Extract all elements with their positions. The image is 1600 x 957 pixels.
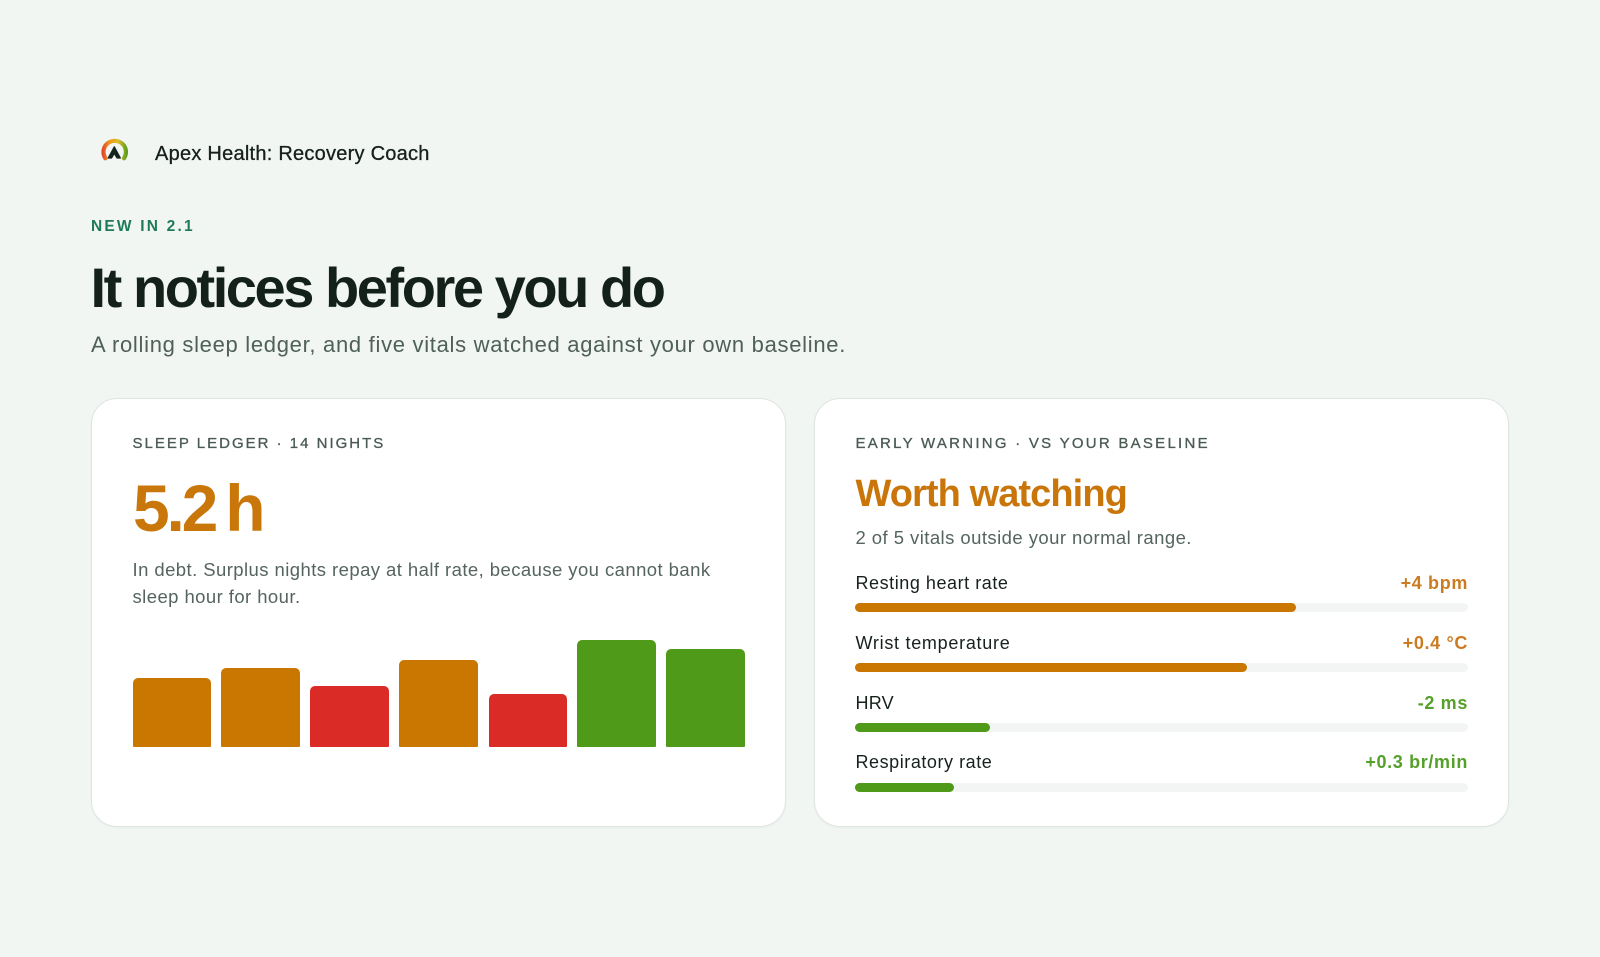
sleep debt explanation: sleep hour for hour. [132,586,301,607]
vital: respiratory rate value: +0.3 br/min [1365,752,1468,772]
vital: resting heart rate label: Resting heart rate [856,573,1008,593]
vital: wrist temperature bar [855,663,1468,672]
vital: resting heart rate value: +4 bpm [1401,573,1468,593]
vital: wrist temperature value: +0.4 °C [1403,633,1468,653]
vital: resting heart rate bar [855,603,1468,612]
vital: wrist temperature label: Wrist temperature [856,633,1010,653]
sleep debt explanation: In debt. Surplus nights repay at half rate, because you cannot bank [132,559,711,580]
sleep ledger heading: SLEEP LEDGER · 14 NIGHTS [132,435,385,452]
vital: HRV value: -2 ms [1418,692,1468,712]
bar chart: nightly sleep [133,640,745,747]
early warning heading: EARLY WARNING · VS YOUR BASELINE [856,435,1210,452]
vital: HRV bar [855,723,1468,732]
status summary: 2 of 5 vitals outside your normal range. [856,527,1192,548]
panel: sleep ledger [91,398,786,827]
panel: early warning [814,398,1509,827]
vital: HRV label: HRV [856,692,894,712]
vital: respiratory rate label: Respiratory rate [856,752,992,772]
brand name: Apex Health: Recovery Coach [155,142,430,164]
sleep debt figure: 5.2 h [133,471,262,545]
status headline: Worth watching [856,473,1127,515]
sleep debt explanation [132,559,711,607]
vital: respiratory rate bar [855,782,1468,792]
eyebrow: NEW IN 2.1 [91,218,195,235]
subtitle: A rolling sleep ledger, and five vitals watched against your own baseline. [91,332,846,357]
logo: gauge arc with peak mark [101,138,128,160]
title: It notices before you do [90,256,664,319]
